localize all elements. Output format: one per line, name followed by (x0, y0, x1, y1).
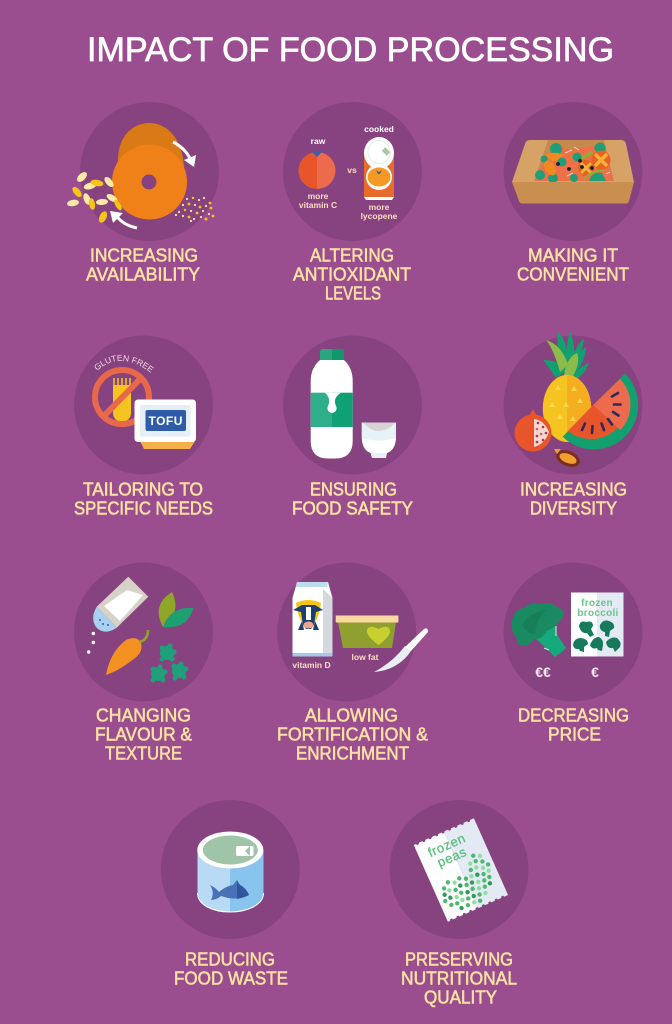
icon: frozen broccoli bag: frozen (581, 598, 613, 609)
icon: tofu box: TOFU (148, 414, 183, 428)
label: REDUCING (185, 948, 275, 969)
icon: fresh broccoli (512, 603, 566, 657)
icon: milled flour dots (175, 197, 214, 222)
label: INCREASING (520, 478, 627, 499)
icon: frozen peas bag: frozen (425, 830, 468, 860)
label: INCREASING (90, 244, 198, 265)
label (174, 948, 288, 988)
label (517, 244, 629, 284)
label (293, 244, 411, 303)
label: FORTIFICATION & (277, 723, 429, 744)
label: CHANGING (96, 704, 191, 725)
icon: gluten free sign: GLUTEN FREE (94, 354, 154, 373)
icon: salt shaker (87, 577, 148, 654)
label (95, 704, 193, 763)
panel: altering antioxidant levels (283, 102, 422, 303)
label: DECREASING (518, 704, 629, 725)
panel: increasing diversity (504, 331, 642, 518)
label (74, 478, 213, 518)
label: NUTRITIONAL (401, 967, 517, 988)
icon: cooked tomato can: lycopene (361, 211, 398, 221)
icon: milk carton with cow: vitamin D (292, 660, 331, 670)
icon: takeaway food box (512, 140, 634, 204)
label (520, 478, 627, 518)
label: CONVENIENT (517, 263, 629, 284)
label (292, 478, 413, 518)
label: ALLOWING (305, 704, 398, 725)
label: ALTERING (310, 244, 394, 265)
label: ENSURING (310, 478, 397, 499)
icon: pomegranate (514, 409, 552, 452)
label: ENRICHMENT (296, 742, 409, 763)
panel: fortification and enrichment (277, 562, 429, 763)
text: euro price low: € (591, 664, 599, 680)
icon: cooked tomato can (361, 124, 398, 221)
panel: reducing food waste (161, 800, 300, 988)
label: FLAVOUR & (95, 723, 193, 744)
label: PRESERVING (405, 948, 513, 969)
label: TEXTURE (105, 742, 182, 763)
icon: date fruit (554, 447, 582, 470)
icon: raw tomato (298, 136, 337, 210)
icon: milk carton with cow (292, 582, 332, 670)
icon: raw tomato: raw (311, 136, 326, 146)
label: FOOD WASTE (174, 967, 288, 988)
icon: raw tomato: more (308, 191, 329, 201)
icon: frozen broccoli bag: broccoli (577, 608, 619, 619)
panel: decreasing price (504, 562, 642, 744)
icon: cooked tomato can: more (369, 202, 390, 212)
icon: frozen peas bag: peas (435, 844, 469, 870)
label (86, 244, 200, 284)
icon: herb leaves (159, 592, 194, 627)
text: euro price high: €€ (535, 664, 551, 680)
icon: cooked tomato can: cooked (364, 124, 394, 134)
food mix (535, 142, 613, 183)
panel: making it convenient (504, 102, 642, 284)
label: TAILORING TO (83, 478, 203, 499)
label: MAKING IT (528, 244, 618, 265)
icon: watermelon slice (563, 374, 638, 449)
icon: green peppercorn clusters (150, 644, 188, 682)
label: LEVELS (325, 282, 381, 303)
label (277, 704, 429, 763)
icon: glass of milk (362, 422, 396, 458)
icon: chilli pepper (106, 630, 148, 675)
icon: butter knife (374, 628, 428, 672)
icon: grain mill disc (110, 123, 196, 228)
label: ANTIOXIDANT (293, 263, 411, 284)
icon: tin of fish (197, 832, 264, 912)
icon: milk bottle (311, 349, 353, 458)
icon: whole grains (67, 170, 123, 224)
icon: low fat tub (336, 616, 398, 662)
label: FOOD SAFETY (292, 497, 413, 518)
panel: changing flavour and texture (74, 562, 213, 763)
icon: pineapple (543, 331, 591, 442)
icon: low fat tub: low fat (352, 652, 379, 662)
label: AVAILABILITY (86, 263, 200, 284)
panel: ensuring food safety (283, 336, 422, 518)
panel: preserving nutritional quality (390, 800, 528, 1007)
panel: increasing availability (67, 102, 219, 284)
text: vs: vs (347, 165, 357, 175)
icon: gluten free sign (92, 354, 154, 427)
panel: tailoring to specific needs (74, 336, 213, 518)
label: PRICE (548, 723, 601, 744)
label: QUALITY (424, 986, 497, 1007)
icon: tofu box (134, 400, 196, 449)
icon: frozen broccoli bag (571, 592, 624, 656)
label (401, 948, 517, 1007)
icon: raw tomato: vitamin C (299, 200, 337, 210)
label: SPECIFIC NEEDS (74, 497, 213, 518)
icon: frozen peas bag (413, 817, 509, 923)
label (518, 704, 629, 744)
label: DIVERSITY (530, 497, 617, 518)
title: IMPACT OF FOOD PROCESSING (87, 31, 614, 69)
